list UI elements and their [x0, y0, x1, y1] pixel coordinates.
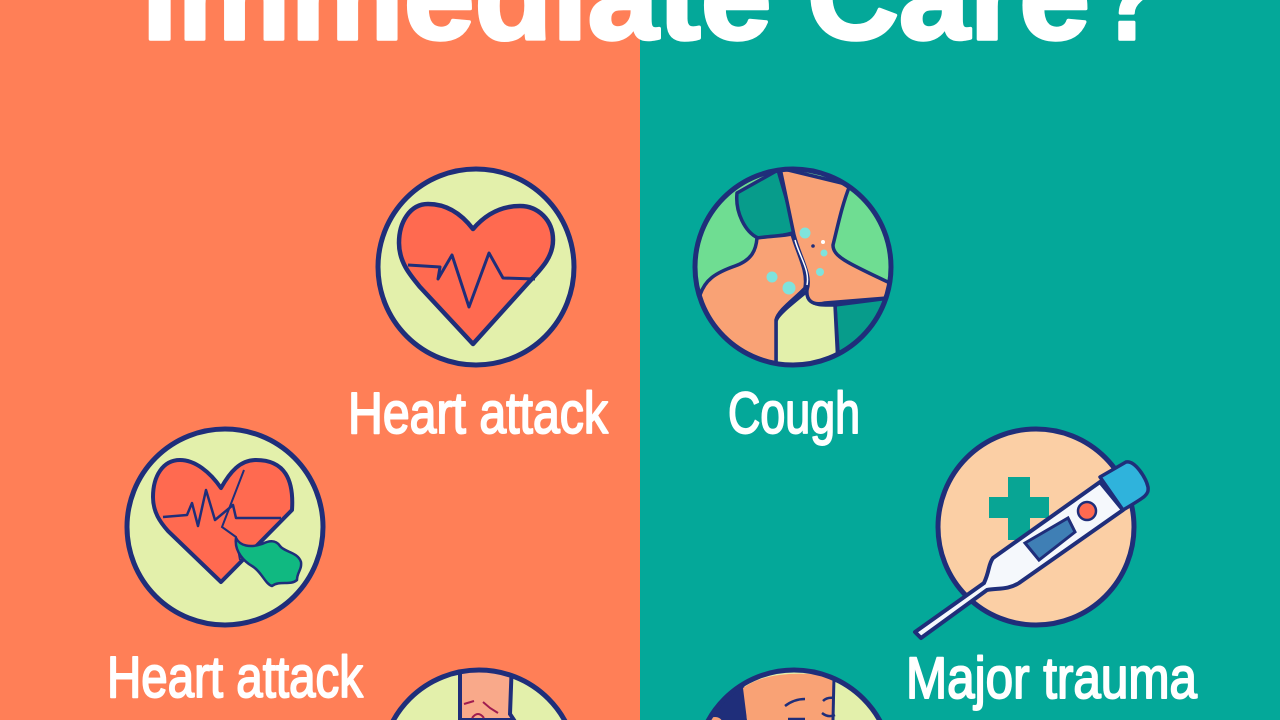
label: cough: Cough [728, 381, 860, 446]
icon: sleeping person head, cropped [696, 670, 892, 720]
label: heart attack second: Heart attack [107, 645, 364, 710]
icon: coughing figures [695, 168, 891, 370]
label: major trauma: Major trauma [906, 646, 1198, 711]
panel: left orange background [0, 0, 640, 720]
icon: heart with pulse [378, 169, 574, 365]
icon: thermometer with medical cross [915, 429, 1148, 638]
icon: broken heart with green spill [127, 429, 323, 625]
panel: right teal background [640, 0, 1280, 720]
icon: leg with rash, cropped [390, 668, 568, 720]
label: heart attack: Heart attack [348, 381, 609, 446]
